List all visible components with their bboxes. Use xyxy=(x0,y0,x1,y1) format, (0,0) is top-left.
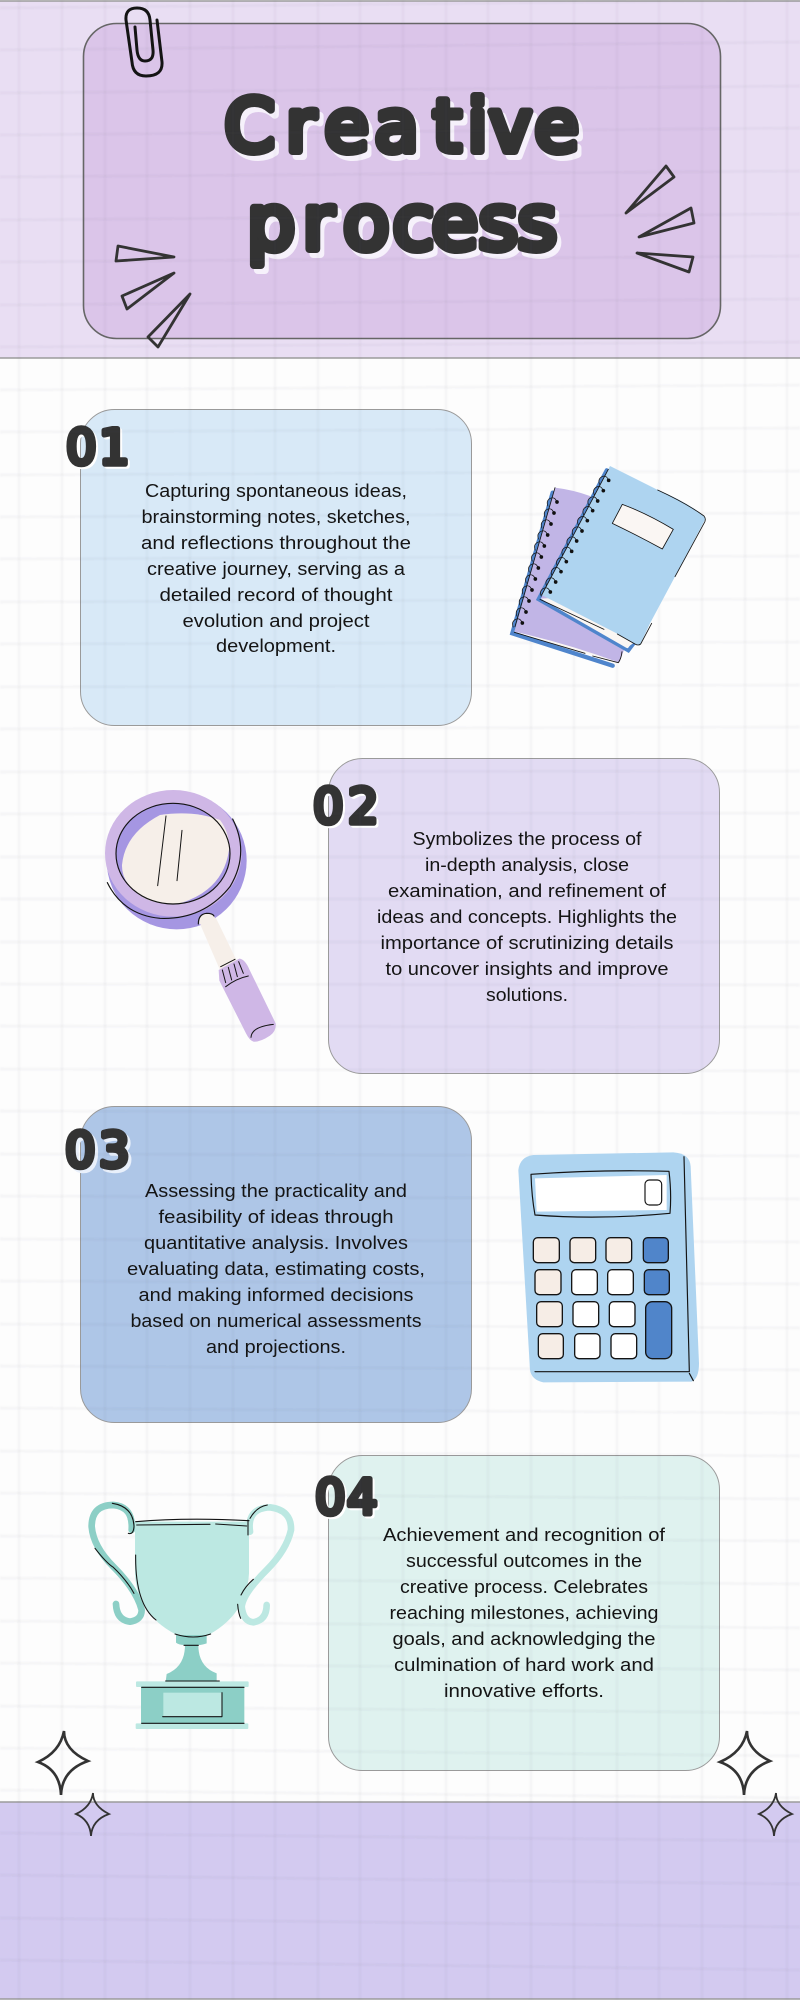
footer band xyxy=(0,1802,800,1999)
icon: magnifying glass xyxy=(105,790,276,1042)
step 2 text: to uncover insights and improve xyxy=(386,958,668,979)
step 2 text: examination, and refinement of xyxy=(388,880,667,901)
title panel xyxy=(84,24,720,338)
icon: calculator xyxy=(518,1152,699,1382)
step 3 text: evaluating data, estimating costs, xyxy=(127,1258,425,1279)
step 1 text: development. xyxy=(216,635,336,656)
number 01: 01 xyxy=(66,420,130,476)
step 1 text: creative journey, serving as a xyxy=(147,558,406,579)
step 2 text: ideas and concepts. Highlights the xyxy=(377,906,677,927)
step 1 text: detailed record of thought xyxy=(160,584,392,605)
icon: sparkle small left xyxy=(76,1793,109,1836)
step 1 text: evolution and project xyxy=(182,610,370,631)
title: process xyxy=(251,183,561,272)
number 04: 04 xyxy=(315,1470,378,1526)
step 2 text xyxy=(377,828,677,1005)
title: Creative xyxy=(224,84,579,168)
icon: sparkle large left xyxy=(38,1731,88,1795)
icon: paper clip xyxy=(126,8,162,76)
icon: right spark lines xyxy=(626,166,694,272)
number 02: 02 xyxy=(315,781,381,837)
icon: left spark lines xyxy=(116,246,190,347)
panel: step 4 xyxy=(315,1456,720,1770)
icon: sparkle small right xyxy=(759,1793,792,1836)
step 3 text: feasibility of ideas through xyxy=(158,1206,394,1227)
step 4 text: goals, and acknowledging the xyxy=(392,1628,656,1649)
number 02: 02 xyxy=(313,779,379,835)
step 4 text: Achievement and recognition of xyxy=(383,1524,666,1545)
step 3 text: and making informed decisions xyxy=(138,1284,414,1305)
step 4 text: culmination of hard work and xyxy=(394,1654,654,1675)
step 1 text: brainstorming notes, sketches, xyxy=(142,506,410,527)
step 3 text: Assessing the practicality and xyxy=(145,1180,407,1201)
step 2 text: solutions. xyxy=(486,984,568,1005)
title xyxy=(224,84,583,272)
step 2 text: Symbolizes the process of xyxy=(412,828,642,849)
panel: step 1 xyxy=(66,410,472,726)
panel: step 2 xyxy=(313,758,720,1074)
icon: trophy xyxy=(92,1503,291,1729)
step 4 text xyxy=(383,1524,666,1701)
step 2 text: importance of scrutinizing details xyxy=(380,932,674,953)
step 3 text: based on numerical assessments xyxy=(130,1310,422,1331)
icon: sparkle large right xyxy=(720,1731,770,1795)
panel: step 3 xyxy=(65,1106,472,1422)
step 3 text: and projections. xyxy=(206,1336,346,1357)
number 04: 04 xyxy=(317,1472,380,1528)
step 4 text: reaching milestones, achieving xyxy=(390,1602,658,1623)
step 1 text: and reflections throughout the xyxy=(141,532,411,553)
number 03: 03 xyxy=(65,1123,130,1179)
step 4 text: successful outcomes in the xyxy=(406,1550,642,1571)
step 4 text: innovative efforts. xyxy=(444,1680,604,1701)
step 3 text: quantitative analysis. Involves xyxy=(144,1232,408,1253)
number 01: 01 xyxy=(68,422,132,478)
step 4 text: creative process. Celebrates xyxy=(400,1576,648,1597)
step 1 text xyxy=(141,480,411,656)
title: process xyxy=(247,178,557,267)
title: Creative xyxy=(228,89,583,173)
step 1 text: Capturing spontaneous ideas, xyxy=(145,480,407,501)
step 3 text xyxy=(127,1180,425,1357)
number 03: 03 xyxy=(68,1126,133,1182)
step 2 text: in-depth analysis, close xyxy=(425,854,629,875)
icon: notebooks xyxy=(512,466,706,666)
header band xyxy=(0,1,800,358)
